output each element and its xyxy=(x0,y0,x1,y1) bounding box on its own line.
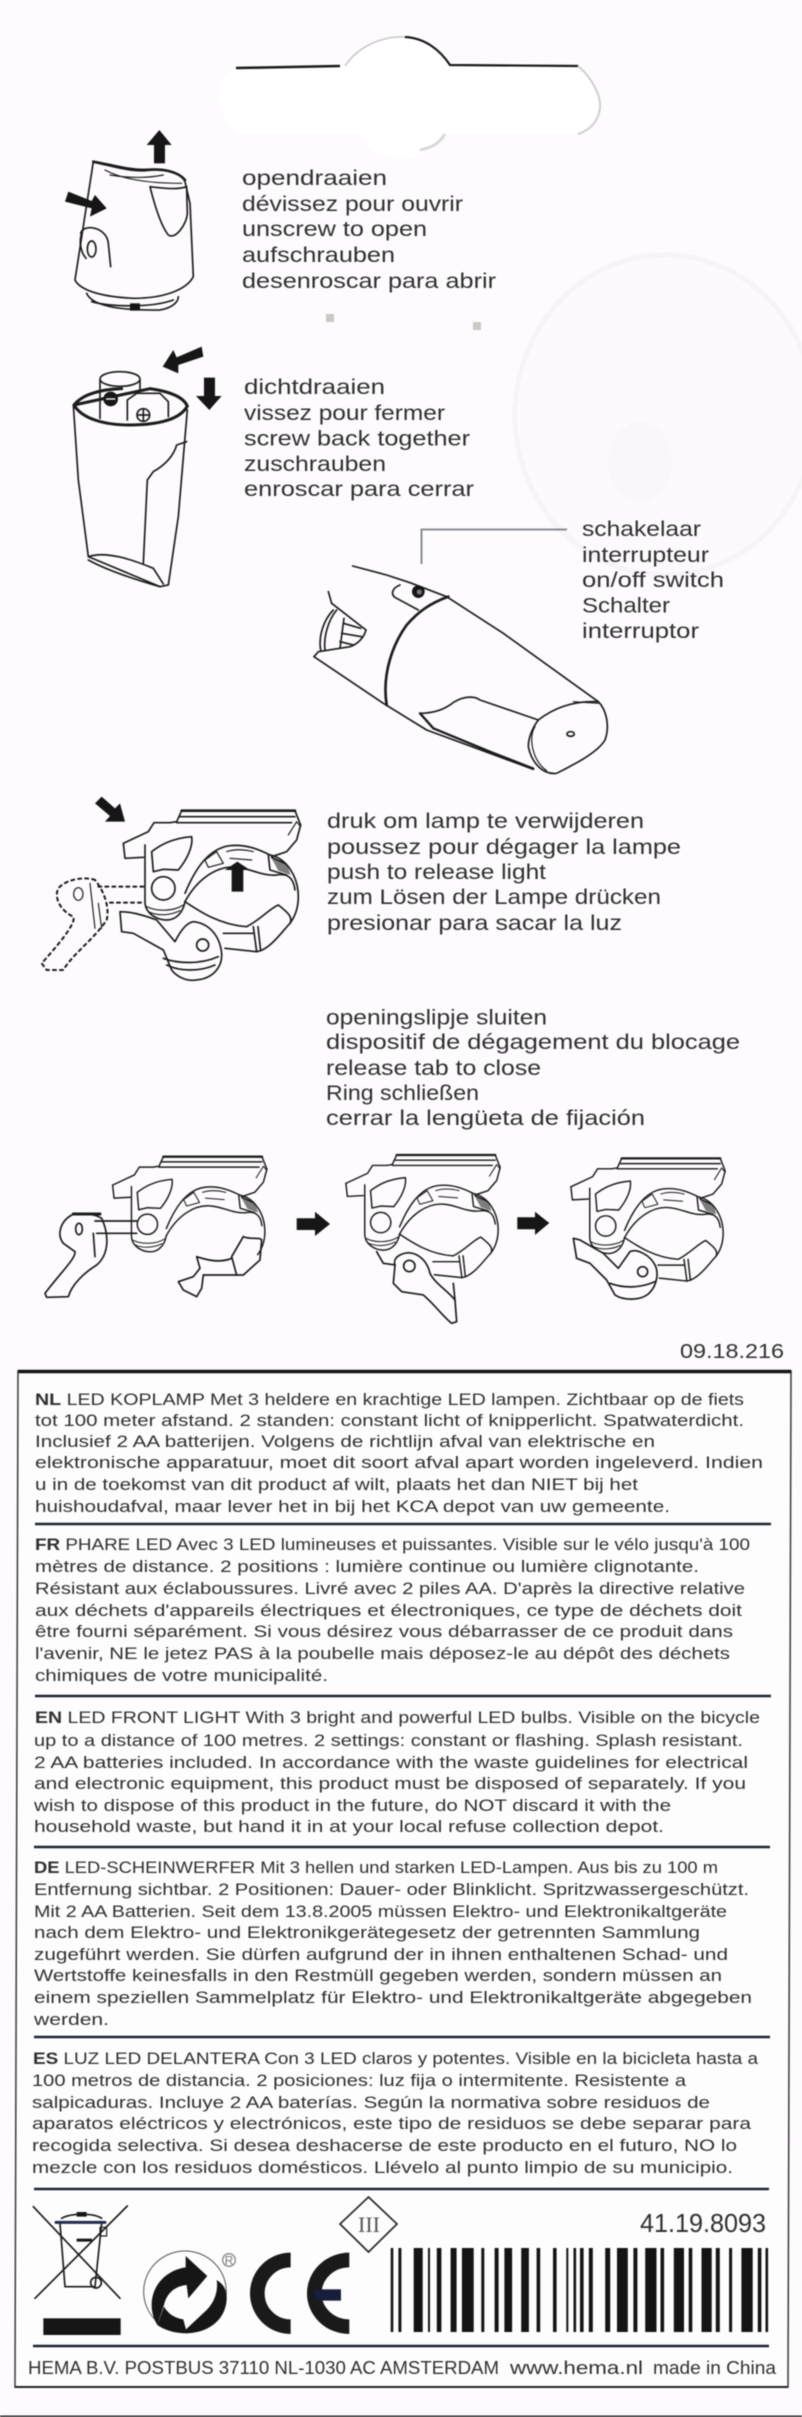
text block: switch: interrupteur xyxy=(582,544,709,567)
text block: close tab: cerrar la lengüeta de fijación xyxy=(326,1107,645,1130)
text block: release light: druk om lamp te verwijderen xyxy=(327,810,644,833)
text block: ES: salpicaduras. Incluye 2 AA baterías. Según la normativa sobre residuos de xyxy=(32,2094,710,2112)
text block: close tab: Ring schließen xyxy=(326,1082,479,1105)
text block: close tab: openingslipje sluiten xyxy=(326,1006,547,1030)
barcode xyxy=(391,2248,768,2332)
text block: switch: on/off switch xyxy=(582,569,724,592)
text block: NL xyxy=(35,1391,763,1516)
text block: NL: elektronische apparatuur, moet dit soort afval apart worden ingeleverd. Indien xyxy=(35,1454,763,1472)
text block: unscrew: dévissez pour ouvrir xyxy=(242,193,463,216)
footer address: www.hema.nl xyxy=(509,2358,643,2378)
text block: FR: aux déchets d'appareils électriques et électroniques, ce type de déchets doit xyxy=(35,1602,743,1620)
text block: unscrew: aufschrauben xyxy=(242,244,395,267)
footer address: HEMA B.V. POSTBUS 37110 NL-1030 AC AMSTERDAM xyxy=(28,2358,499,2378)
text block: close tab: release tab to close xyxy=(326,1057,541,1080)
illustration: lamp unscrewing xyxy=(65,130,193,311)
text block: FR: FR PHARE LED Avec 3 LED lumineuses et puissantes. Visible sur le vélo jusqu'à 100 xyxy=(35,1536,750,1554)
text block: EN: 2 AA batteries included. In accordance with the waste guidelines for electrical xyxy=(34,1754,748,1772)
text block: ES: recogida selectiva. Si desea deshacerse de este producto en el futuro, NO lo xyxy=(32,2137,737,2155)
text block: DE: Entfernung sichtbar. 2 Positionen: Dauer- oder Blinklicht. Spritzwassergeschützt. xyxy=(34,1881,749,1899)
icon: diagonal arrow xyxy=(163,347,203,373)
text block: DE: DE LED-SCHEINWERFER Mit 3 hellen und starken LED-Lampen. Aus bis zu 100 m xyxy=(34,1859,718,1877)
icon: green dot recycling mark xyxy=(144,2251,235,2333)
text block: NL: NL LED KOPLAMP Met 3 heldere en krachtige LED lampen. Zichtbaar op de fiets xyxy=(35,1391,744,1409)
illustration: clamp closed xyxy=(571,1158,725,1299)
text block: ES: ES LUZ LED DELANTERA Con 3 LED claros y potentes. Visible en la bicicleta hasta a xyxy=(33,2050,759,2068)
illustration: lamp with switch xyxy=(314,566,607,773)
text block: ES: mezcle con los residuos domésticos. Llévelo al punto limpio de su municipio. xyxy=(32,2159,733,2177)
text block: DE: werden. xyxy=(33,2011,109,2029)
icon: down arrow xyxy=(196,378,222,410)
text block: EN: and electronic equipment, this product must be disposed of separately. If you xyxy=(34,1775,746,1793)
text block: EN xyxy=(33,1709,760,1836)
text block: EN: up to a distance of 100 metres. 2 settings: constant or flashing. Splash resistant. xyxy=(34,1732,743,1750)
black bar xyxy=(43,2318,121,2335)
reference number: 09.18.216 xyxy=(680,1341,784,1363)
text block: NL: Inclusief 2 AA batterijen. Volgens de richtlijn afval van elektrische en xyxy=(35,1433,655,1451)
text block: EN: wish to dispose of this product in the future, do NOT discard it with the xyxy=(33,1797,671,1815)
text block: DE xyxy=(33,1859,752,2029)
icon: up arrow xyxy=(225,862,250,892)
text block: unscrew: opendraaien xyxy=(242,167,387,190)
text block: switch: schakelaar xyxy=(582,518,701,541)
text block: unscrew xyxy=(242,167,496,293)
text block: DE: zugeführt werden. Sie dürfen aufgrund der in ihnen enthaltenen Schad- und xyxy=(34,1946,728,1964)
footer address: made in China xyxy=(653,2358,777,2378)
text block: unscrew: unscrew to open xyxy=(242,218,427,241)
text block: ES xyxy=(32,2050,759,2177)
illustration: lamp screwing together xyxy=(73,347,222,587)
footer address xyxy=(28,2358,777,2378)
text block: FR xyxy=(35,1536,750,1685)
text block: switch xyxy=(582,518,724,643)
text block: DE: nach dem Elektro- und Elektronikgerätegesetz der getrennten Sammlung xyxy=(34,1924,700,1942)
specks xyxy=(326,314,481,330)
text block: FR: mètres de distance. 2 positions : lumière continue ou lumière clignotante. xyxy=(35,1558,699,1576)
illustration: clamp lever folding xyxy=(346,1155,500,1323)
text block: NL: tot 100 meter afstand. 2 standen: constant licht of knipperlicht. Spatwaterdicht. xyxy=(35,1412,744,1430)
text block: EN: EN LED FRONT LIGHT With 3 bright and powerful LED bulbs. Visible on the bicycle xyxy=(35,1709,760,1727)
text block: release light xyxy=(327,810,681,935)
text block: FR: être fourni séparément. Si vous désirez vous débarrasser de ce produit dans xyxy=(35,1623,733,1641)
text block: close tab: dispositif de dégagement du blocage xyxy=(326,1031,740,1054)
text block: NL: huishoudafval, maar lever het in bij het KCA depot van uw gemeente. xyxy=(35,1498,670,1516)
icon: class III diamond: III xyxy=(358,2212,380,2237)
illustration: clamp open xyxy=(45,1157,267,1297)
icon: right arrow xyxy=(65,192,107,217)
text block: screw back xyxy=(244,376,474,501)
icon: arrow between clamps xyxy=(517,1212,549,1235)
text block: ES: 100 metros de distancia. 2 posiciones: luz fija o intermitente. Resistente a xyxy=(32,2072,687,2090)
text block: FR: chimiques de votre municipalité. xyxy=(35,1667,328,1685)
dotted lever xyxy=(42,878,145,970)
text block: close tab xyxy=(326,1006,740,1130)
text block: screw back: screw back together xyxy=(244,428,470,450)
illustration: clamp release xyxy=(42,797,301,980)
text block: screw back: enroscar para cerrar xyxy=(244,478,474,501)
icon: CE mark xyxy=(257,2260,349,2327)
icon: up arrow xyxy=(147,130,172,163)
text block: release light: zum Lösen der Lampe drücken xyxy=(327,886,661,909)
text block: switch: interruptor xyxy=(582,620,699,643)
text block: screw back: dichtdraaien xyxy=(244,376,385,399)
article number: 41.19.8093 xyxy=(640,2208,766,2238)
icon: class III diamond xyxy=(340,2197,397,2252)
text block: NL: u in de toekomst van dit product af wilt, plaats het dan NIET bij het xyxy=(35,1476,639,1494)
text block: FR: Résistant aux éclaboussures. Livré avec 2 piles AA. D'après la directive relative xyxy=(35,1580,745,1598)
hang hole cut-out xyxy=(218,37,600,159)
leader line to switch xyxy=(422,530,567,564)
text block: EN: household waste, but hand it in at your local refuse collection depot. xyxy=(34,1818,664,1836)
icon: green dot recycling mark: R xyxy=(225,2253,234,2267)
icon: diagonal arrow xyxy=(95,797,125,822)
text block: DE: einem speziellen Sammelplatz für Elektro- und Elektronikaltgeräte abgegeben xyxy=(34,1989,752,2007)
text block: ES: aparatos eléctricos y electrónicos, este tipo de residuos se debe separar para xyxy=(32,2115,752,2133)
text block: release light: push to release light xyxy=(327,861,546,884)
text block: screw back: vissez pour fermer xyxy=(244,402,445,425)
icon: crossed-out wheelie bin xyxy=(33,2206,127,2335)
text block: DE: Mit 2 AA Batterien. Seit dem 13.8.2005 müssen Elektro- und Elektronikaltgeräte xyxy=(34,1903,727,1921)
text block: release light: poussez pour dégager la lampe xyxy=(327,836,681,859)
text block: unscrew: desenroscar para abrir xyxy=(242,270,496,293)
text block: switch: Schalter xyxy=(582,594,670,618)
panel: multi-language description box xyxy=(15,1371,791,2387)
text block: release light: presionar para sacar la luz xyxy=(327,912,622,935)
text block: FR: l'avenir, NE le jetez PAS à la poubelle mais déposez-le au dépôt des déchets xyxy=(35,1645,730,1663)
icon: arrow between clamps xyxy=(297,1212,330,1236)
text block: DE: Wertstoffe keinesfalls in den Restmüll gegeben werden, sondern müssen an xyxy=(34,1967,722,1985)
text block: screw back: zuschrauben xyxy=(244,453,386,476)
